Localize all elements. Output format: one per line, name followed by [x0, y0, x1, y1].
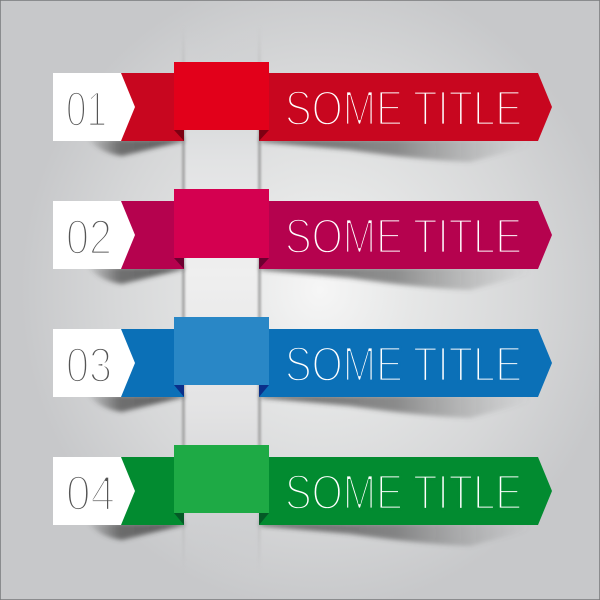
- title: SOME TITLE: [285, 210, 522, 264]
- ribbon 01: [53, 62, 552, 162]
- central vertical strip: [182, 25, 261, 575]
- band: [121, 73, 552, 141]
- number: 01: [66, 83, 107, 137]
- title: SOME TITLE: [285, 82, 522, 136]
- centre square: [174, 62, 269, 130]
- number tab: [53, 457, 135, 525]
- fold triangles: [174, 385, 269, 397]
- centre square: [174, 317, 269, 385]
- ribbon 03: [53, 317, 552, 418]
- title: SOME TITLE: [285, 466, 522, 520]
- band: [121, 329, 552, 397]
- band: [121, 457, 552, 525]
- number: 03: [66, 339, 112, 393]
- fold triangles: [174, 513, 269, 525]
- fold triangles: [174, 258, 269, 269]
- shadows: [88, 139, 530, 162]
- centre square: [174, 445, 269, 513]
- ribbon 04: [53, 445, 552, 546]
- number: 04: [66, 467, 115, 521]
- number tab: [53, 329, 135, 397]
- shadows: [88, 395, 530, 418]
- band: [121, 201, 552, 269]
- shadows: [88, 523, 530, 546]
- number tab: [53, 201, 135, 269]
- number tab: [53, 73, 135, 141]
- fold triangles: [174, 130, 269, 141]
- shadows: [88, 267, 530, 290]
- title: SOME TITLE: [285, 338, 522, 392]
- centre square: [174, 189, 269, 258]
- number: 02: [66, 211, 112, 265]
- ribbon 02: [53, 189, 552, 290]
